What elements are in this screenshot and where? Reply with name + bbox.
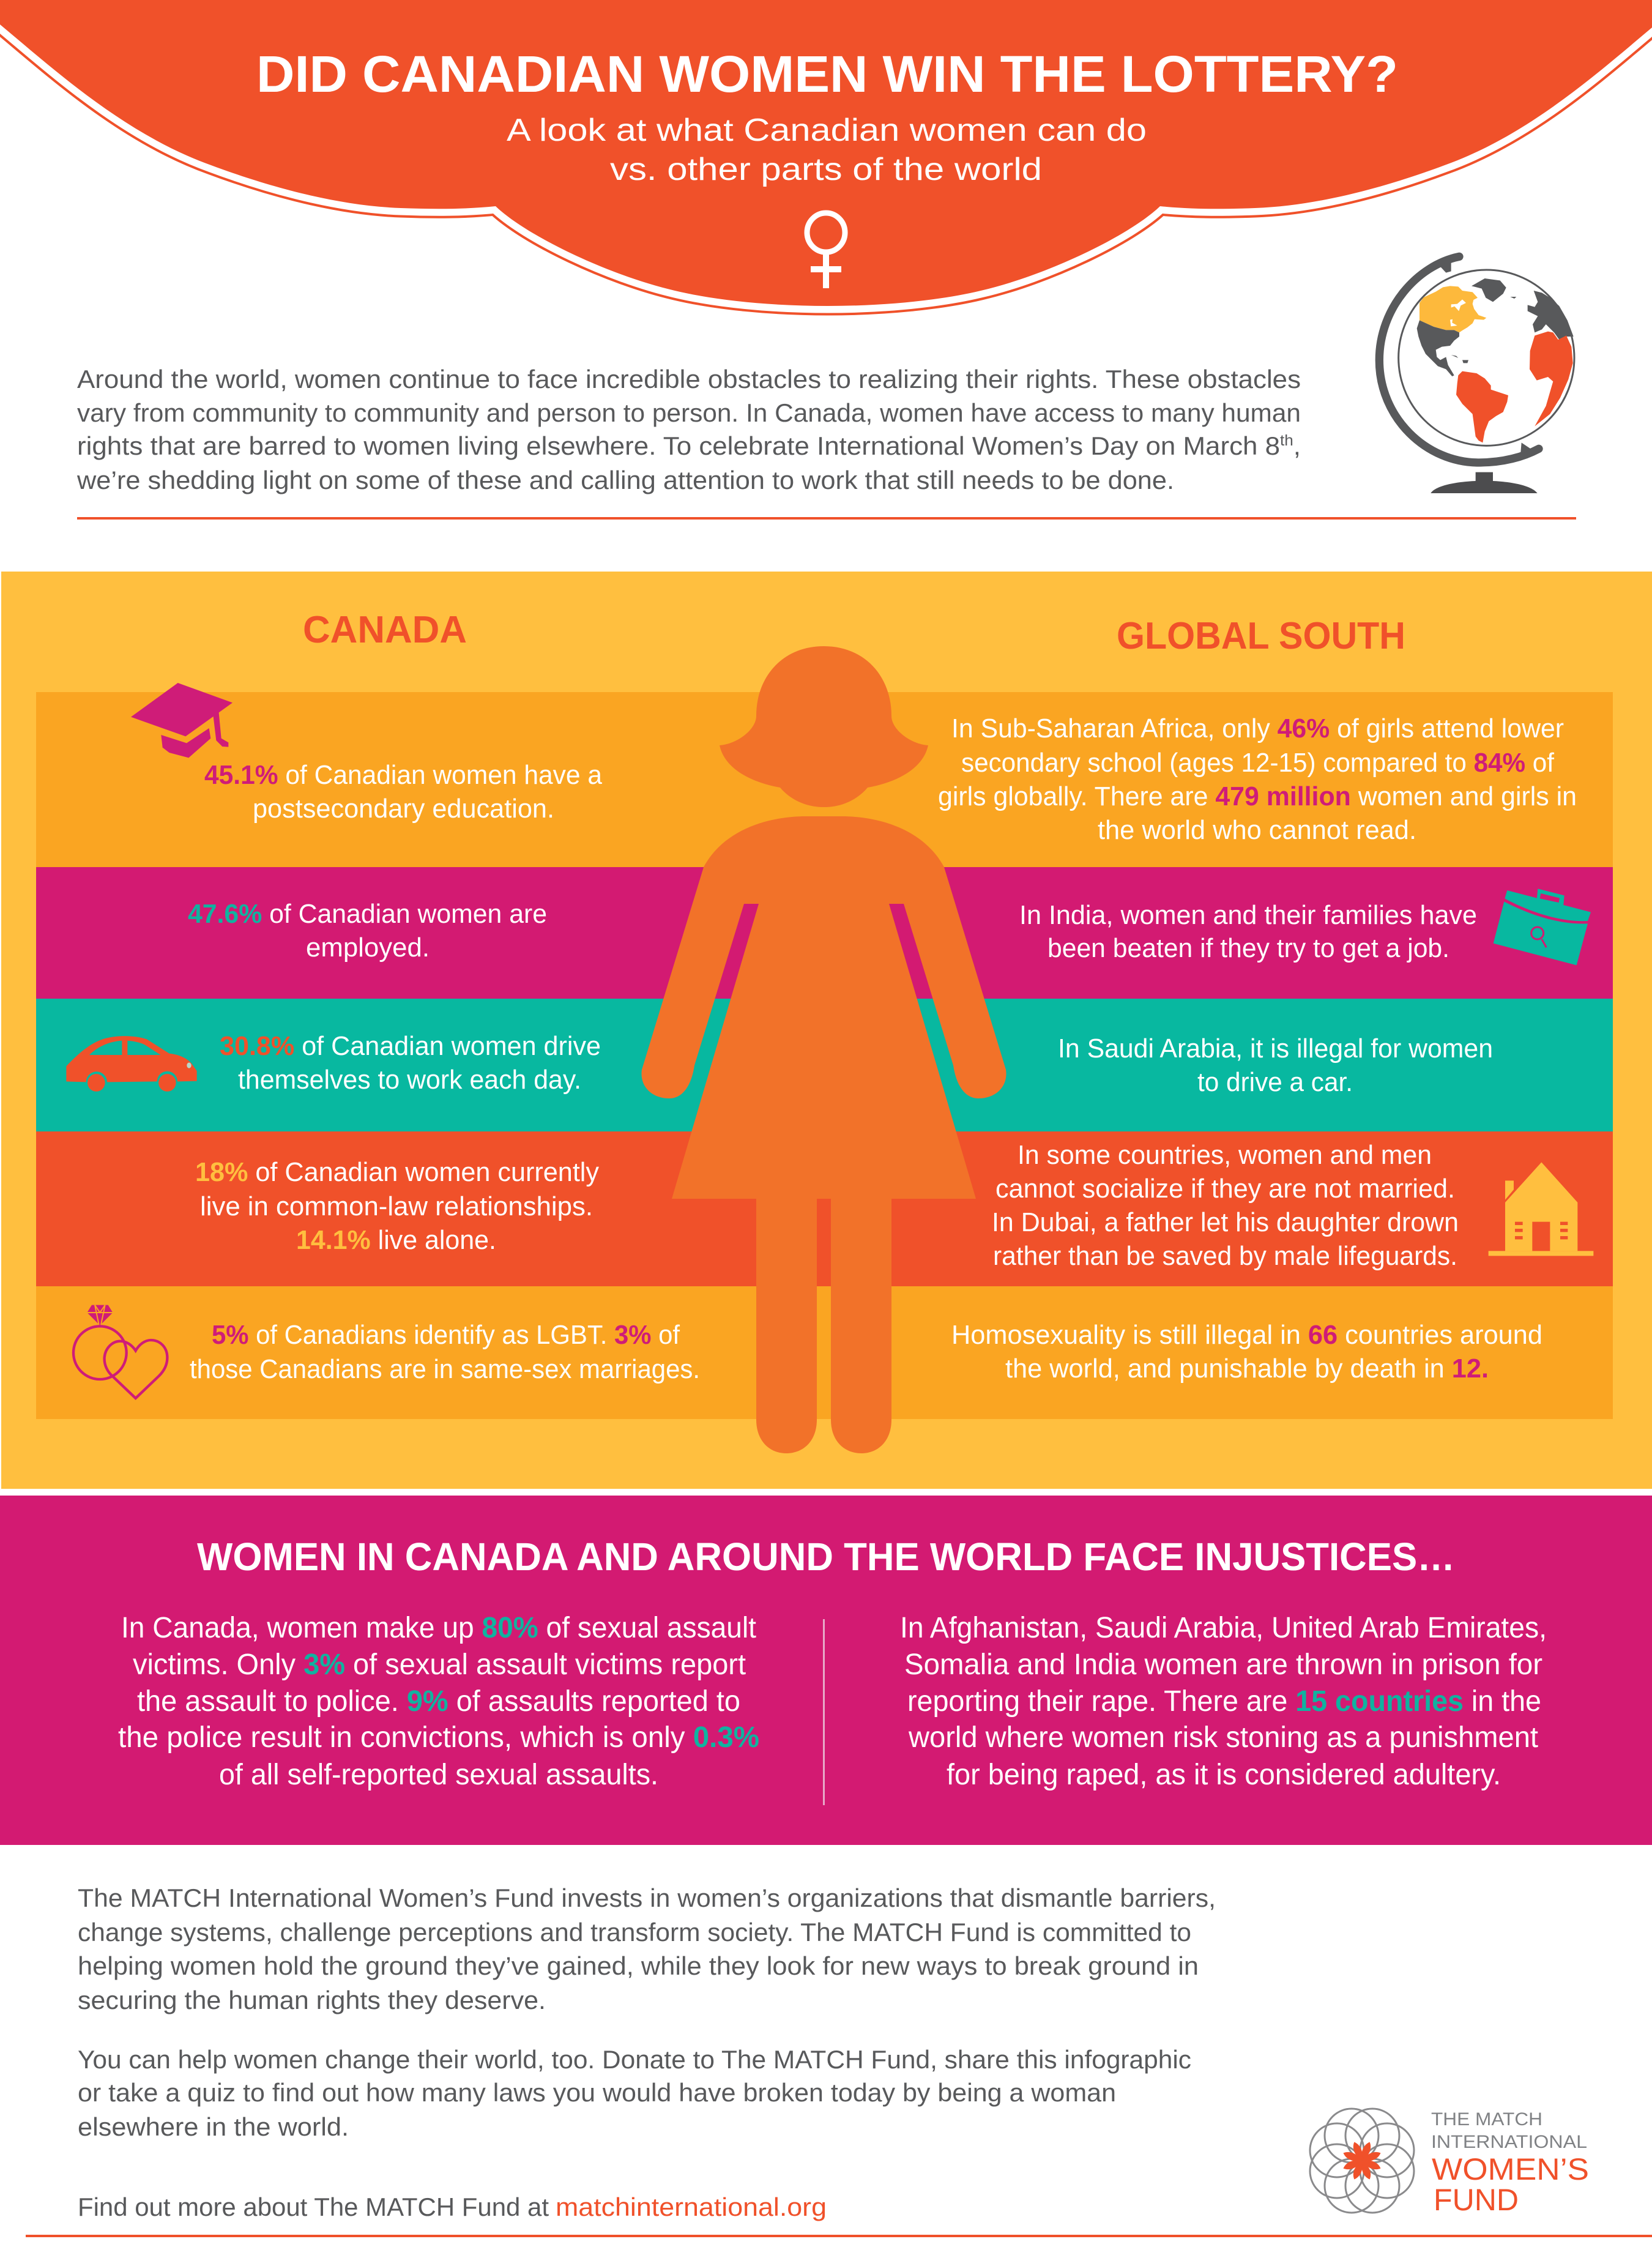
- intro paragraph: th: [1280, 432, 1293, 449]
- logo: rosette: [1310, 2109, 1414, 2213]
- injustices left text: In Canada, women make up 80% of sexual assault: [121, 1612, 756, 1644]
- icon: graduation cap: [131, 683, 233, 758]
- icon: globe: [1379, 256, 1574, 493]
- row 2 right text: [1019, 900, 1477, 963]
- panel: comparison: [1, 572, 1652, 1489]
- logo: wordmark: WOMEN’S: [1432, 2152, 1589, 2186]
- logo: wordmark: FUND: [1434, 2183, 1519, 2217]
- row 4 right text: [992, 1140, 1459, 1271]
- about paragraph: change systems, challenge perceptions and transform society. The MATCH Fund is committed to: [78, 1918, 1191, 1947]
- injustices left text: the assault to police. 9% of assaults reported to: [137, 1685, 740, 1718]
- find out more link: [78, 2193, 827, 2221]
- title: DID CANADIAN WOMEN WIN THE LOTTERY?: [256, 45, 1398, 103]
- row 4 left text: 18% of Canadian women currently: [195, 1157, 599, 1187]
- injustices right text: world where women risk stoning as a punishment: [908, 1721, 1538, 1754]
- row 3 left text: 30.8% of Canadian women drive: [220, 1031, 601, 1061]
- injustices right text: [900, 1612, 1547, 1791]
- about paragraph: securing the human rights they deserve.: [78, 1986, 546, 2014]
- intro paragraph: Around the world, women continue to face incredible obstacles to realizing their rights. These obstacles: [77, 365, 1301, 393]
- row 2 left text: 47.6% of Canadian women are: [188, 899, 547, 929]
- subtitle: A look at what Canadian women can do: [507, 113, 1147, 148]
- row 4 right text: cannot socialize if they are not married.: [995, 1174, 1455, 1204]
- row 2 left text: [188, 899, 547, 963]
- row 2 right text: been beaten if they try to get a job.: [1047, 933, 1449, 963]
- intro paragraph: rights that are barred to women living elsewhere. To celebrate International Women’s Day on March 8: [77, 431, 1229, 460]
- logo: wordmark: THE MATCH: [1431, 2109, 1542, 2129]
- row 3 left text: themselves to work each day.: [238, 1065, 581, 1095]
- logo: wordmark: INTERNATIONAL: [1431, 2132, 1587, 2152]
- row 1 left text: postsecondary education.: [253, 794, 554, 824]
- row 5 left text: 5% of Canadians identify as LGBT. 3% of: [212, 1320, 680, 1350]
- row 4 left text: 14.1% live alone.: [296, 1225, 496, 1255]
- call to action paragraph: or take a quiz to find out how many laws you would have broken today by being a woman: [78, 2078, 1116, 2107]
- injustices right text: Somalia and India women are thrown in prison for: [904, 1649, 1542, 1681]
- injustices right text: for being raped, as it is considered adultery.: [947, 1759, 1501, 1791]
- subtitle: vs. other parts of the world: [610, 152, 1042, 187]
- row 3 right text: to drive a car.: [1197, 1067, 1353, 1097]
- row 3 right text: [1058, 1034, 1493, 1097]
- heading: Global South: GLOBAL SOUTH: [1117, 615, 1405, 657]
- row 1 right text: girls globally. There are 479 million women and girls in: [938, 781, 1577, 811]
- row 1 right text: In Sub-Saharan Africa, only 46% of girls attend lower: [951, 714, 1564, 743]
- row 5 right text: [951, 1320, 1542, 1384]
- row 5 left text: those Canadians are in same-sex marriages.: [190, 1354, 700, 1384]
- injustices right text: In Afghanistan, Saudi Arabia, United Arab Emirates,: [900, 1612, 1547, 1644]
- injustices left text: of all self-reported sexual assaults.: [219, 1759, 658, 1791]
- about paragraph: The MATCH International Women’s Fund invests in women’s organizations that dismantle barriers,: [78, 1884, 1216, 1912]
- panel: injustices: [0, 1496, 1652, 1845]
- about paragraph: helping women hold the ground they’ve gained, while they look for new ways to break ground in: [78, 1951, 1199, 1980]
- intro paragraph: ,: [1293, 431, 1301, 460]
- find out more link: matchinternational.org: [556, 2193, 827, 2221]
- subtitle: [507, 113, 1147, 187]
- row 3 left text: [220, 1031, 601, 1095]
- heading: Canada: CANADA: [303, 609, 467, 651]
- row 4 left text: live in common-law relationships.: [200, 1191, 593, 1221]
- icon: car: [66, 1036, 197, 1092]
- row 4 left text: [195, 1157, 599, 1255]
- call to action paragraph: elsewhere in the world.: [78, 2112, 349, 2141]
- row 1 right text: secondary school (ages 12-15) compared to 84% of: [961, 748, 1555, 778]
- about paragraph: [78, 1884, 1216, 2014]
- woman figure: [641, 646, 1006, 1453]
- call to action paragraph: [78, 2045, 1191, 2141]
- injustices left text: victims. Only 3% of sexual assault victims report: [133, 1649, 746, 1681]
- intro paragraph: we’re shedding light on some of these and calling attention to work that still needs to be done.: [76, 466, 1174, 494]
- row 5 right text: the world, and punishable by death in 12.: [1005, 1354, 1489, 1384]
- row 4 right text: In Dubai, a father let his daughter drown: [992, 1207, 1459, 1237]
- logo: wordmark: [1431, 2109, 1589, 2217]
- row 1 left text: [204, 760, 603, 824]
- icon: female symbol: [807, 213, 845, 288]
- row 1 right text: the world who cannot read.: [1098, 815, 1416, 845]
- row 5 right text: Homosexuality is still illegal in 66 countries around: [951, 1320, 1542, 1350]
- injustices left text: the police result in convictions, which is only 0.3%: [118, 1721, 759, 1754]
- row 4 right text: In some countries, women and men: [1018, 1140, 1432, 1170]
- row 3 right text: In Saudi Arabia, it is illegal for women: [1058, 1034, 1493, 1064]
- injustices heading: WOMEN IN CANADA AND AROUND THE WORLD FACE INJUSTICES…: [197, 1535, 1455, 1579]
- row 5 left text: [190, 1320, 700, 1384]
- injustices right text: reporting their rape. There are 15 countries in the: [907, 1685, 1541, 1718]
- injustices left text: [118, 1612, 759, 1791]
- row 1 left text: 45.1% of Canadian women have a: [204, 760, 603, 790]
- call to action paragraph: You can help women change their world, too. Donate to The MATCH Fund, share this infographic: [78, 2045, 1191, 2074]
- row 4 right text: rather than be saved by male lifeguards.: [993, 1241, 1457, 1271]
- find out more link: Find out more about The MATCH Fund at: [78, 2193, 549, 2221]
- icon: briefcase: [1494, 889, 1591, 965]
- row 2 left text: employed.: [306, 933, 430, 963]
- intro paragraph: [76, 365, 1301, 494]
- row 1 right text: [938, 714, 1577, 845]
- intro paragraph: vary from community to community and person to person. In Canada, women have access to many human: [77, 398, 1301, 427]
- icon: ring and heart: [73, 1305, 167, 1398]
- icon: house: [1489, 1162, 1593, 1256]
- header banner: [0, 0, 1652, 306]
- row 2 right text: In India, women and their families have: [1019, 900, 1477, 930]
